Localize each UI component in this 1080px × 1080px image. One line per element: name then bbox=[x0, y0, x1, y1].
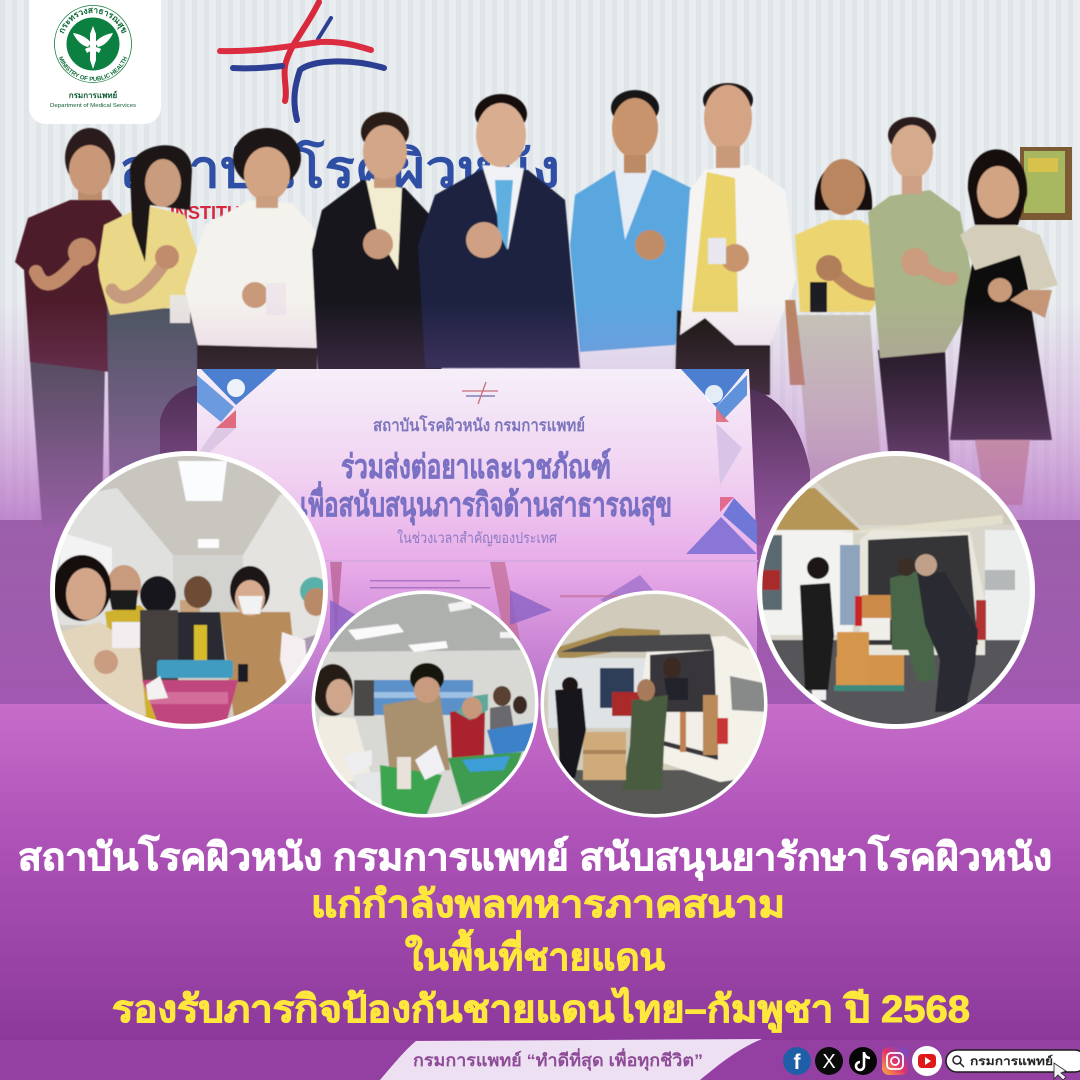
logo card: Department of Medical Services bbox=[50, 103, 136, 109]
draped table bbox=[160, 385, 810, 545]
photo circle: packing medicine bbox=[312, 590, 538, 822]
wall sign text: สถาบันโรคผิวหนัง bbox=[120, 138, 560, 199]
ministry seal: กระทรวงสาธารณสุข bbox=[60, 8, 127, 34]
photo circle: loading van, wide view bbox=[540, 590, 770, 830]
banner text bbox=[300, 415, 672, 547]
logo card bbox=[29, 0, 161, 124]
icon: facebook: f bbox=[794, 1051, 802, 1074]
headline: รองรับภารกิจป้องกันชายแดนไทย–กัมพูชา ปี 2568 bbox=[112, 987, 970, 1033]
ministry seal: MINISTRY OF PUBLIC HEALTH bbox=[58, 56, 128, 81]
ministry seal bbox=[54, 5, 132, 83]
icon: facebook bbox=[783, 1047, 811, 1075]
icon: instagram bbox=[882, 1047, 908, 1075]
banner text: สถาบันโรคผิวหนัง กรมการแพทย์ bbox=[373, 415, 585, 435]
search box: กรมการแพทย์ bbox=[970, 1054, 1053, 1068]
banner corner decorations bbox=[197, 369, 757, 554]
headline bbox=[18, 834, 1052, 1033]
person 9 bbox=[868, 117, 976, 470]
search box bbox=[946, 1050, 1080, 1080]
person 8 bbox=[785, 159, 896, 480]
wall logo bbox=[220, 2, 384, 120]
banner logo bbox=[462, 382, 498, 404]
banner bbox=[197, 369, 758, 704]
icon: tiktok bbox=[849, 1047, 877, 1075]
background wall bbox=[0, 0, 1080, 710]
wall sign text: INSTITUTE bbox=[170, 203, 263, 223]
person 1 bbox=[15, 128, 122, 525]
photo circle: loading van, close view bbox=[755, 450, 1040, 735]
icon: x bbox=[815, 1047, 843, 1075]
person 3 bbox=[185, 128, 327, 385]
wall painting bbox=[1020, 147, 1072, 220]
purple fade overlay bbox=[0, 300, 1080, 704]
person 4 bbox=[312, 112, 442, 375]
footer bar bbox=[0, 1039, 1080, 1080]
printed document sheets bbox=[318, 560, 758, 640]
headline: ในพื้นที่ชายแดน bbox=[405, 929, 665, 979]
icon: cursor bbox=[1054, 1063, 1066, 1080]
slogan ribbon bbox=[380, 1039, 762, 1080]
banner text: เพื่อสนับสนุนภารกิจด้านสาธารณสุข bbox=[300, 481, 672, 526]
slogan ribbon: กรมการแพทย์ “ทำดีที่สุด เพื่อทุกชีวิต” bbox=[413, 1048, 703, 1071]
banner text: ร่วมส่งต่อยาและเวชภัณฑ์ bbox=[341, 448, 611, 485]
person 6 bbox=[570, 90, 703, 375]
department name: กรมการแพทย์ bbox=[69, 90, 118, 100]
wall sign text bbox=[120, 138, 560, 223]
person 10 bbox=[950, 149, 1058, 505]
headline: แก่กำลังพลทหารภาคสนาม bbox=[311, 884, 785, 926]
person 2 bbox=[98, 145, 199, 520]
icon: youtube bbox=[912, 1046, 942, 1076]
banner text: ในช่วงเวลาสำคัญของประเทศ bbox=[397, 529, 557, 547]
lower purple panel bbox=[0, 704, 1080, 1040]
person 7 bbox=[675, 83, 796, 395]
person 5 bbox=[418, 94, 580, 368]
photo circle: staff holding medicine packs bbox=[50, 450, 330, 730]
icon: x: X bbox=[822, 1051, 836, 1073]
group photo: ten staff members bbox=[15, 83, 1058, 525]
headline: สถาบันโรคผิวหนัง กรมการแพทย์ สนับสนุนยารักษาโรคผิวหนัง bbox=[18, 834, 1052, 881]
